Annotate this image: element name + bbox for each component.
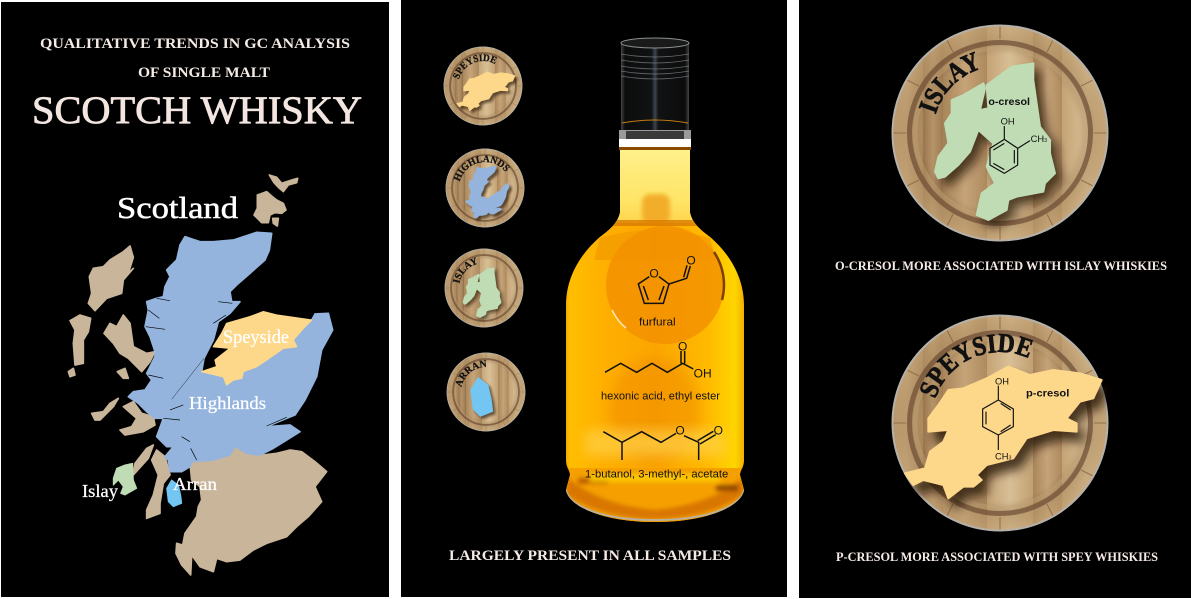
molecule: acetate: O [714,423,723,437]
label: p-cresol: p-cresol [1026,389,1069,400]
badge: Islay with o-cresol: ISLAY [918,51,978,114]
molecule: p-cresol: OH [995,376,1009,386]
molecule: o-cresol: CH3 [1031,134,1047,144]
molecule: furfural: O [686,254,696,268]
title: Scotch Whisky: SCOTCH WHISKY [32,89,362,132]
molecule: p-cresol [983,376,1013,461]
label: Highlands: Highlands [189,393,266,413]
title: of single malt: OF SINGLE MALT [138,65,270,81]
region: Highlands [128,232,333,472]
molecule: furfural: O [649,266,659,280]
caption: p-cresol: P-CRESOL MORE ASSOCIATED WITH SPEY WHISKIES [836,550,1158,564]
badge: Speyside [444,46,522,126]
label: o-cresol: o-cresol [988,97,1030,108]
molecule: acetate [603,423,723,460]
badge: Islay [444,248,524,328]
bottle liquid [560,150,750,530]
badge: Highlands [446,148,524,228]
molecule: o-cresol [990,117,1047,173]
panel: cresols [799,0,1191,598]
badge: Speyside with p-cresol: SPEYSIDE [920,334,1034,398]
badge: Islay with o-cresol [892,24,1108,242]
bottle cap [621,38,689,130]
badge: Speyside with p-cresol [892,314,1108,532]
label: furfural: furfural [639,317,676,329]
region: Islay [113,463,137,495]
caption: o-cresol: O-CRESOL MORE ASSOCIATED WITH ISLAY WHISKIES [835,259,1167,273]
label: hexonic acid: hexonic acid, ethyl ester [601,391,720,403]
molecule: acetate: O [675,423,685,437]
bottle [560,38,750,530]
caption: largely present: LARGELY PRESENT IN ALL SAMPLES [449,548,731,564]
panel: map of Scotland [1,2,389,597]
badge: Arran: ARRAN [456,360,486,388]
molecule: hexonic acid: O [678,339,687,353]
panel: bottle and compounds [401,0,787,597]
title: qualitative trends: QUALITATIVE TRENDS IN GC ANALYSIS [40,36,350,52]
compounds on bottle [585,254,728,481]
label: butanol acetate: 1-butanol, 3-methyl-, acetate [585,469,728,481]
region: Speyside [202,312,312,385]
molecule: p-cresol: CH3 [995,451,1011,461]
label: Islay: Islay [82,481,118,501]
bottle neck glass [619,130,691,150]
label: Arran: Arran [173,474,217,494]
molecule: hexonic acid [605,339,712,380]
molecule: o-cresol: OH [1001,117,1015,127]
badge: Arran [446,352,526,432]
heading: Scotland: Scotland [117,190,239,225]
molecule: hexonic acid: OH [694,366,712,380]
badge: Islay: ISLAY [452,257,477,284]
region: islands and lowlands [68,175,327,575]
molecule: furfural [638,254,696,303]
region: Arran [167,480,182,507]
badge: Highlands: HIGHLANDS [453,155,510,182]
label: Speyside: Speyside [223,327,289,348]
badge: Speyside: SPEYSIDE [453,54,497,80]
map regions [68,175,333,575]
